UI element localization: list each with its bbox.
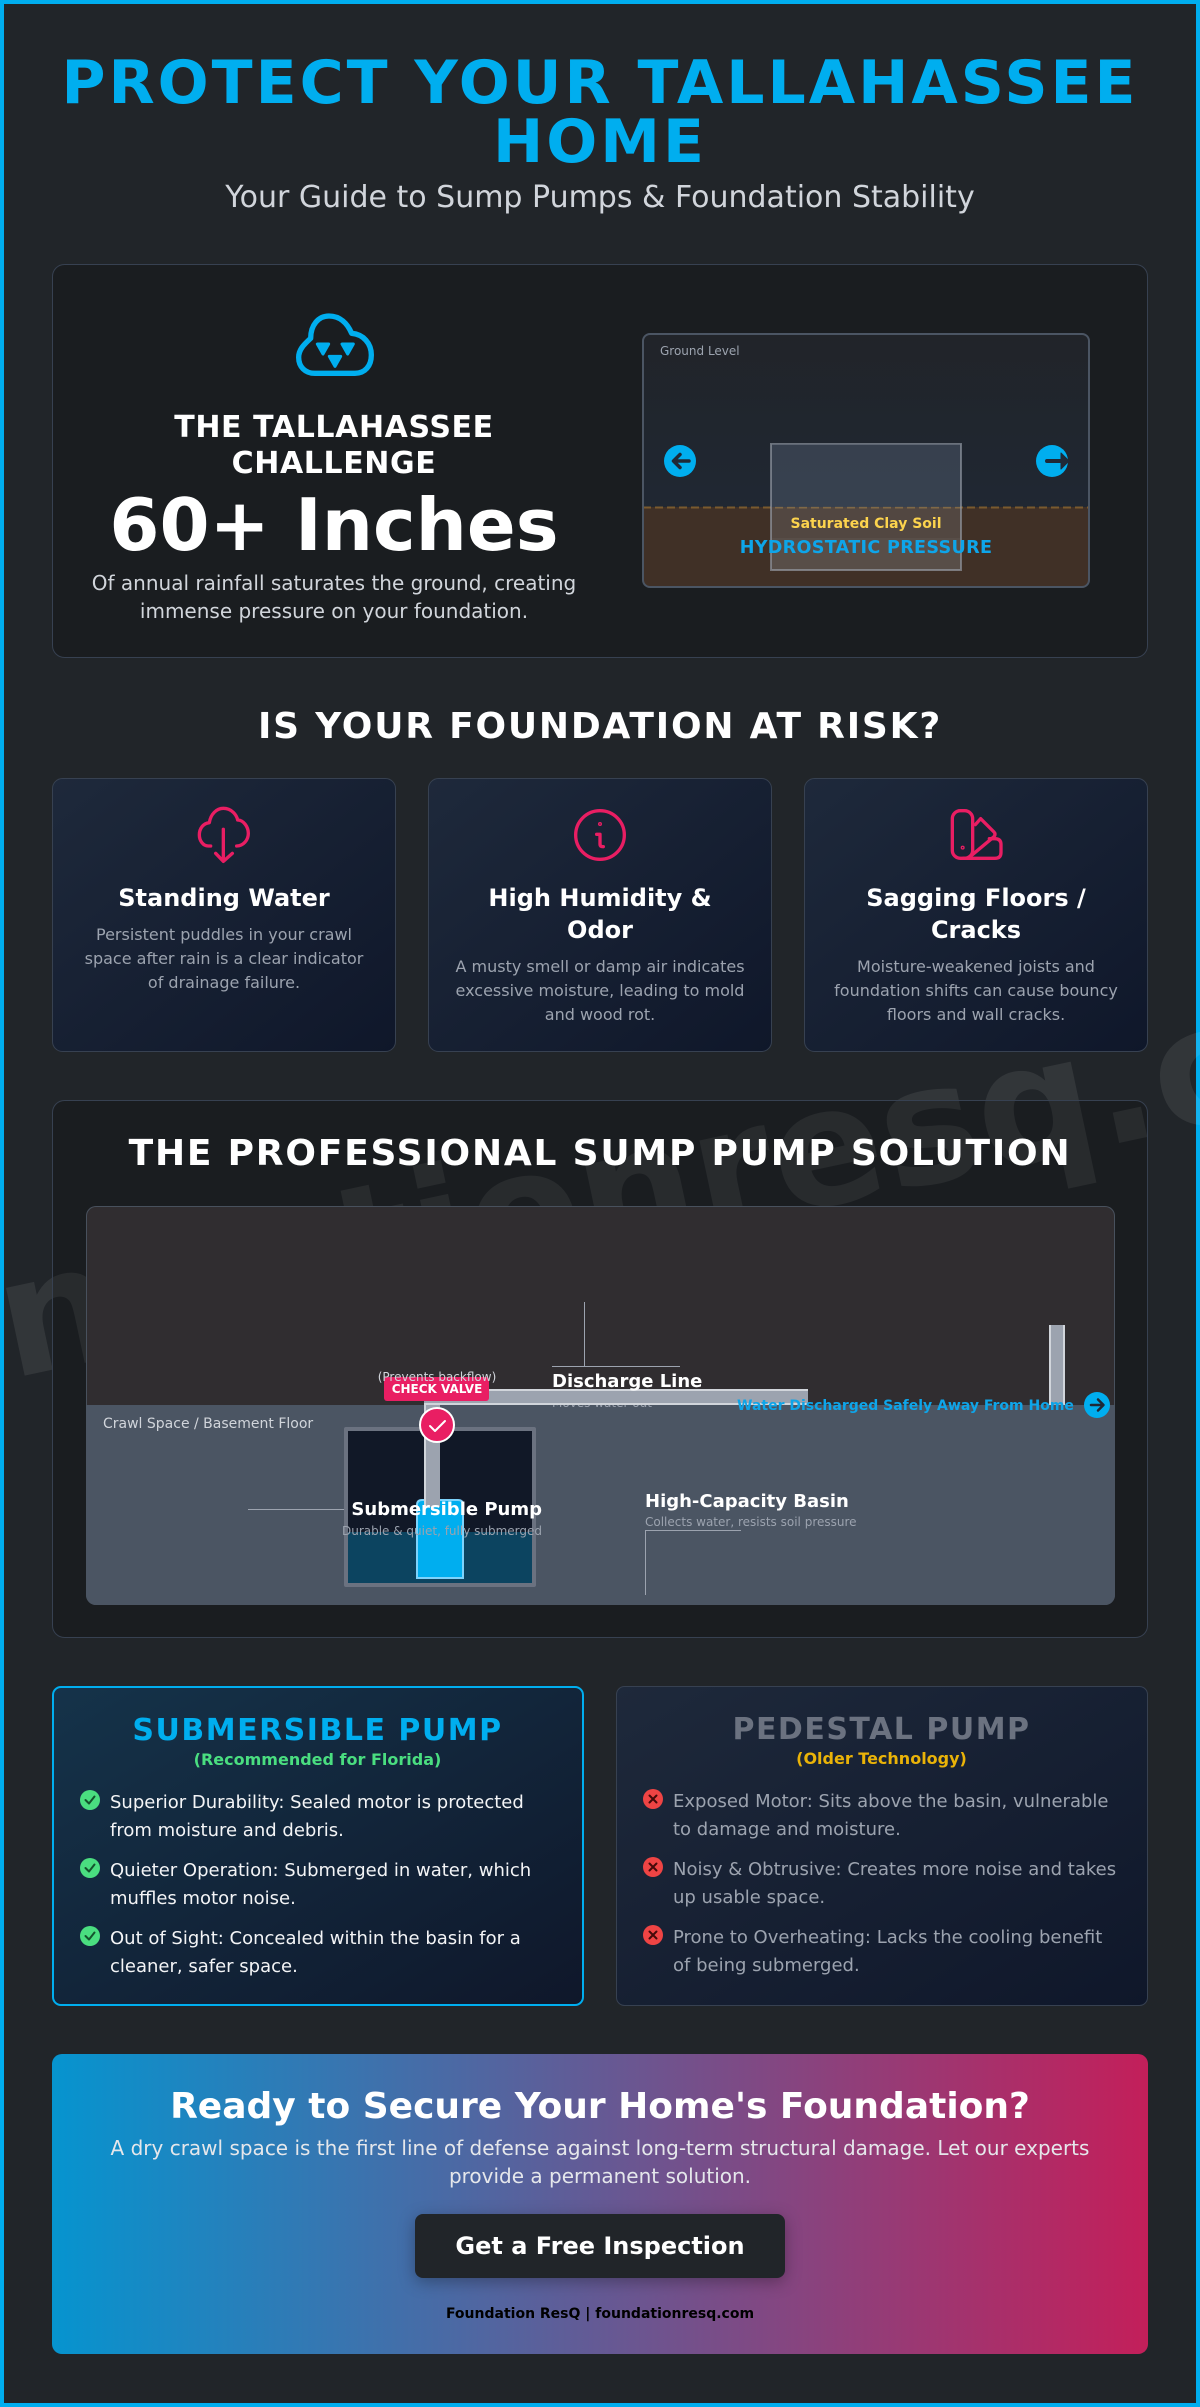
card heading: Odor [567, 916, 633, 944]
drawback: exposed motor: Exposed Motor: Sits above the basin, vulnerable [673, 1791, 1108, 1812]
callout: discharge line: Discharge Line [552, 1371, 702, 1392]
card description: and wood rot. [545, 1005, 655, 1024]
title: PROTECT YOUR TALLAHASSEE [61, 48, 1139, 118]
card heading: Sagging Floors / [866, 884, 1086, 912]
recommendation: (Recommended for Florida) [194, 1750, 441, 1769]
basin [346, 1429, 534, 1585]
button [415, 2214, 785, 2278]
drawback: noisy: Noisy & Obtrusive: Creates more noise and takes [673, 1859, 1116, 1880]
callout: submersible pump: Submersible Pump [351, 1499, 542, 1520]
heading: is your foundation at risk: IS YOUR FOUNDATION AT RISK? [258, 706, 942, 747]
benefit: out of sight [80, 1926, 521, 1977]
card description: excessive moisture, leading to mold [456, 981, 744, 1000]
benefit: durability [80, 1790, 524, 1841]
card description: A musty smell or damp air indicates [455, 957, 745, 976]
card heading [866, 884, 1086, 944]
pipe label underneath: discharge sub-text: Moves water out [552, 1396, 652, 1410]
card heading: Cracks [931, 916, 1021, 944]
drawback: exposed motor: to damage and moisture. [673, 1819, 901, 1840]
cta text: A dry crawl space is the first line of defense against long-term structural damage. Let our experts [111, 2136, 1089, 2160]
panel: the Tallahassee challenge [52, 264, 1148, 658]
icon: info circle [576, 811, 624, 859]
card description [834, 957, 1118, 1024]
footer: Foundation ResQ | foundationresq.com [446, 2306, 754, 2322]
section heading: THE PROFESSIONAL SUMP PUMP SOLUTION [129, 1133, 1071, 1174]
benefit: out of sight: Out of Sight: Concealed within the basin for a [110, 1928, 521, 1949]
icon: cloud download [199, 808, 248, 861]
callout: basin: High-Capacity Basin [645, 1491, 849, 1512]
card description [85, 925, 364, 992]
callout: discharge line [552, 1302, 702, 1392]
cta text: provide a permanent solution. [449, 2164, 751, 2188]
subtitle: Your Guide to Sump Pumps & Foundation Stability [224, 180, 975, 215]
heading: PEDESTAL PUMP [732, 1712, 1031, 1747]
benefit: quiet: Quieter Operation: Submerged in water, which [110, 1860, 531, 1881]
foundation block [771, 444, 961, 571]
panel: professional sump pump solution [52, 1100, 1148, 1638]
benefit: durability: Superior Durability: Sealed motor is protected [110, 1792, 524, 1813]
check valve tag: CHECK VALVE [392, 1382, 482, 1396]
card description: Persistent puddles in your crawl [96, 925, 352, 944]
panel: pedestal pump [616, 1686, 1148, 2006]
icon: arrow left [664, 445, 696, 477]
panel: high humidity [428, 778, 772, 1052]
soil label: Saturated Clay Soil [790, 516, 942, 532]
drawback: noisy [643, 1857, 1116, 1908]
card heading [488, 884, 712, 944]
panel: submersible pump [53, 1687, 583, 2005]
rainfall description [92, 571, 576, 623]
rainfall description: Of annual rainfall saturates the ground, creating [92, 571, 576, 595]
check valve note: (Prevents backflow) [378, 1370, 496, 1384]
challenge heading [174, 410, 494, 481]
card description [455, 957, 745, 1024]
drawback: overheating [643, 1925, 1102, 1976]
benefit: quiet: muffles motor noise. [110, 1888, 296, 1909]
discharge pipe [424, 1389, 808, 1507]
heading: SUBMERSIBLE PUMP [132, 1713, 503, 1748]
benefit: quiet [80, 1858, 531, 1909]
sump pump cutaway diagram [86, 1206, 1115, 1605]
rainfall description: immense pressure on your foundation. [140, 599, 528, 623]
icon: arrow right [1036, 445, 1069, 477]
icon: discharge arrow [1084, 1392, 1110, 1418]
technology note: (Older Technology) [796, 1749, 967, 1768]
challenge heading: THE TALLAHASSEE [174, 410, 494, 445]
cta text [111, 2136, 1089, 2188]
icon: check valve [420, 1408, 454, 1442]
cta heading: Ready to Secure Your Home's Foundation? [170, 2086, 1030, 2127]
drawback: overheating: Prone to Overheating: Lacks the cooling benefit [673, 1927, 1102, 1948]
benefit: out of sight: cleaner, safer space. [110, 1956, 298, 1977]
callout: submersible pump [248, 1499, 542, 1538]
card heading: High Humidity & [488, 884, 712, 912]
button: Get a Free Inspection [455, 2232, 745, 2260]
ground level label: Ground Level [660, 344, 740, 358]
card description: floors and wall cracks. [887, 1005, 1065, 1024]
icon: swatch book [952, 811, 1001, 858]
callout: submersible pump: Durable & quiet, fully submerged [342, 1524, 542, 1538]
pressure label: HYDROSTATIC PRESSURE [740, 538, 992, 558]
rainfall statistic: 60+ Inches [109, 483, 559, 567]
card description: foundation shifts can cause bouncy [834, 981, 1118, 1000]
outlet pipe [1049, 1325, 1065, 1405]
callout: basin: Collects water, resists soil pressure [645, 1515, 857, 1529]
callout: basin [645, 1491, 857, 1595]
card description: Moisture-weakened joists and [857, 957, 1095, 976]
panel: standing water [52, 778, 396, 1052]
card description: of drainage failure. [148, 973, 300, 992]
hydrostatic pressure diagram [643, 334, 1090, 589]
drawback: overheating: of being submerged. [673, 1955, 860, 1976]
drawback: exposed motor [643, 1789, 1108, 1840]
check valve tag [384, 1377, 489, 1401]
challenge heading: CHALLENGE [232, 446, 436, 481]
floor label: Crawl Space / Basement Floor [103, 1416, 313, 1432]
panel: sagging floors [804, 778, 1148, 1052]
pump [417, 1500, 463, 1578]
card heading: Standing Water [118, 884, 330, 912]
title: HOME [493, 107, 707, 177]
panel: call to action [52, 2054, 1148, 2354]
drawback: noisy: up usable space. [673, 1887, 825, 1908]
card description: space after rain is a clear indicator [85, 949, 364, 968]
discharge caption: Water Discharged Safely Away From Home [737, 1398, 1074, 1414]
title [61, 48, 1139, 177]
icon: rain cloud [299, 316, 371, 373]
benefit: durability: from moisture and debris. [110, 1820, 344, 1841]
